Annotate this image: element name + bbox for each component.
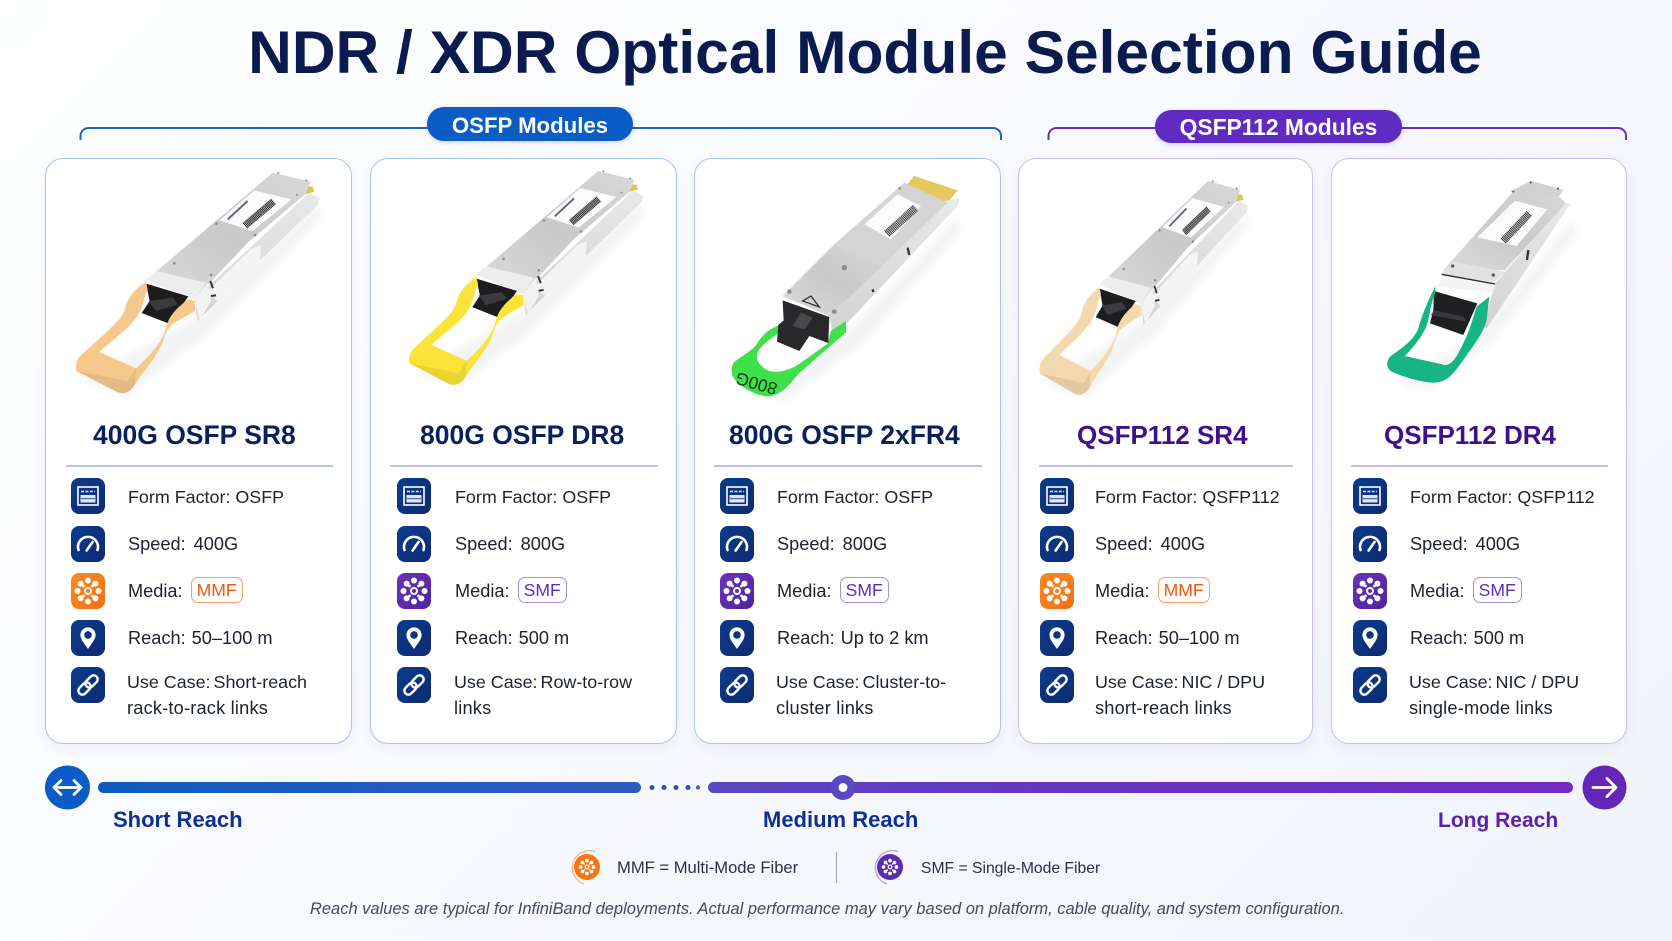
reach scale arrow (45, 766, 1626, 810)
row: media: MMF (1164, 580, 1204, 600)
row: form factor (1353, 478, 1595, 514)
row: speed (71, 526, 238, 562)
card heading: QSFP112 SR4 (1077, 420, 1248, 450)
row: use case: Use Case:Short-reach (127, 672, 307, 692)
row: speed: Speed: 400G (1410, 534, 1520, 554)
row: use case: cluster links (776, 698, 874, 718)
row: speed (1353, 526, 1520, 562)
row: speed (397, 526, 565, 562)
row: use case: Use Case:NIC / DPU (1095, 672, 1265, 692)
legend text: SMF: SMF = Single-Mode Fiber (921, 860, 1100, 877)
row: media (71, 573, 243, 609)
row: form factor (720, 478, 933, 514)
row: media: MMF (197, 580, 237, 600)
row: form factor: Form Factor: OSFP (455, 487, 611, 507)
module image: 800G OSFP 2xFR4 (732, 176, 960, 399)
row: reach (397, 620, 569, 656)
row: media: Media: (1095, 581, 1150, 601)
bracket: OSFP modules (80, 127, 1002, 140)
row: media (1040, 573, 1210, 609)
row: reach: Reach: Up to 2 km (777, 628, 929, 648)
label: long reach: Long Reach (1438, 809, 1558, 832)
bar: medium to long reach (708, 782, 1573, 793)
row: media: Media: (777, 581, 832, 601)
row: speed (720, 526, 887, 562)
row: use case: Use Case:Cluster-to- (776, 672, 946, 692)
bar: short reach (98, 782, 641, 793)
row: speed: Speed: 400G (128, 534, 238, 554)
legend divider (836, 852, 837, 883)
row: reach (1353, 620, 1524, 656)
row: use case (397, 667, 632, 718)
row: use case: links (454, 698, 491, 718)
row: use case (1040, 667, 1265, 718)
row: form factor: Form Factor: QSFP112 (1095, 487, 1280, 507)
row: media: SMF (846, 580, 883, 600)
row: form factor (71, 478, 284, 514)
row: use case: single-mode links (1409, 698, 1553, 718)
module image: QSFP112 SR4 (1040, 180, 1248, 395)
row: media: SMF (524, 580, 561, 600)
row: form factor (1040, 478, 1280, 514)
panel: 800G OSFP DR8 (370, 158, 677, 744)
row: speed (1040, 526, 1205, 562)
module image: QSFP112 DR4 (1387, 180, 1573, 387)
row: reach: Reach: 50–100 m (128, 628, 273, 648)
row: use case: rack-to-rack links (127, 698, 268, 718)
label: short reach: Short Reach (113, 807, 243, 832)
row: use case (71, 667, 307, 718)
row: reach (71, 620, 273, 656)
row: media (720, 573, 889, 609)
row: form factor: Form Factor: QSFP112 (1410, 487, 1595, 507)
panel: 400G OSFP SR8 (45, 158, 352, 744)
row: form factor: Form Factor: OSFP (128, 487, 284, 507)
row: media: SMF (1479, 580, 1516, 600)
row: use case: Use Case:Row-to-row (454, 672, 632, 692)
legend icon: SMF (874, 850, 903, 884)
row: media (1353, 573, 1522, 609)
group heading: QSFP112 Modules: QSFP112 Modules (1180, 114, 1377, 140)
card heading: QSFP112 DR4 (1384, 420, 1556, 450)
row: media: Media: (1410, 581, 1465, 601)
row: reach: Reach: 500 m (1410, 628, 1524, 648)
panel: QSFP112 SR4 (1018, 158, 1313, 744)
module image: 800G OSFP DR8 (409, 170, 643, 385)
row: reach: Reach: 50–100 m (1095, 628, 1240, 648)
row: reach (720, 620, 929, 656)
legend text: MMF: MMF = Multi-Mode Fiber (617, 858, 798, 877)
row: use case (720, 667, 946, 718)
row: use case: Use Case:NIC / DPU (1409, 672, 1579, 692)
module image: 400G OSFP SR8 (76, 172, 320, 394)
row: form factor: Form Factor: OSFP (777, 487, 933, 507)
row: reach: Reach: 500 m (455, 628, 569, 648)
footnote: Reach values are typical for InfiniBand deployments. Actual performance may vary based on platform, cable quality, and system configuration. (310, 900, 1344, 918)
row: media: Media: (128, 581, 183, 601)
row: speed: Speed: 400G (1095, 534, 1205, 554)
panel: QSFP112 DR4 (1331, 158, 1627, 744)
card heading: 400G OSFP SR8 (93, 420, 296, 450)
marker: medium reach (830, 775, 856, 800)
bracket: QSFP112 modules (1048, 127, 1627, 140)
row: speed: Speed: 800G (777, 534, 887, 554)
card heading: 800G OSFP 2xFR4 (729, 420, 960, 450)
row: use case: short-reach links (1095, 698, 1232, 718)
panel: 800G OSFP 2xFR4 (694, 158, 1001, 744)
row: use case (1353, 667, 1579, 718)
card heading: 800G OSFP DR8 (420, 420, 624, 450)
label: medium reach: Medium Reach (763, 807, 918, 832)
row: form factor (397, 478, 611, 514)
group heading: OSFP Modules (427, 107, 633, 141)
row: media: Media: (455, 581, 510, 601)
handle marking: 800G (733, 368, 779, 399)
legend icon: MMF (572, 850, 600, 885)
group heading: QSFP112 Modules (1155, 110, 1402, 143)
icon: short reach double arrow (45, 766, 90, 810)
group heading: OSFP Modules: OSFP Modules (452, 113, 608, 138)
row: reach (1040, 620, 1240, 656)
title: NDR / XDR Optical Module Selection Guide (248, 18, 1482, 86)
row: media (397, 573, 567, 609)
row: speed: Speed: 800G (455, 534, 565, 554)
icon: long reach arrow (1582, 766, 1626, 810)
